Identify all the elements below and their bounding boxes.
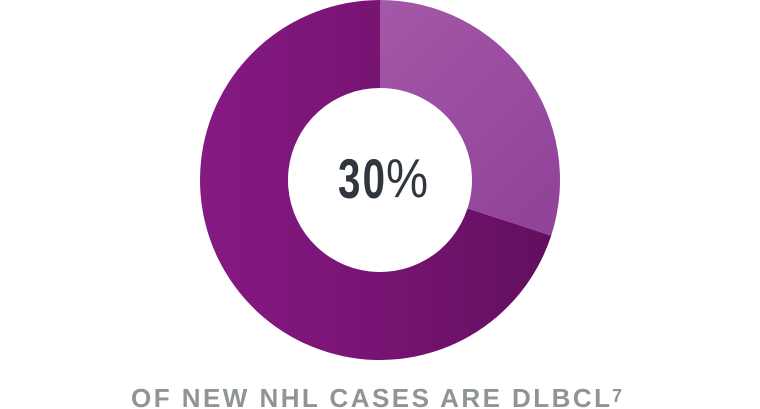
segment: 30% DLBCL — [380, 0, 560, 236]
center value: 30%: % — [386, 148, 428, 209]
center value: 30%: 30 — [338, 149, 387, 211]
center value: 30% — [338, 148, 428, 211]
segment: 70% remainder — [200, 0, 551, 360]
donut chart — [200, 0, 560, 360]
footnote marker: 7 — [612, 386, 622, 406]
